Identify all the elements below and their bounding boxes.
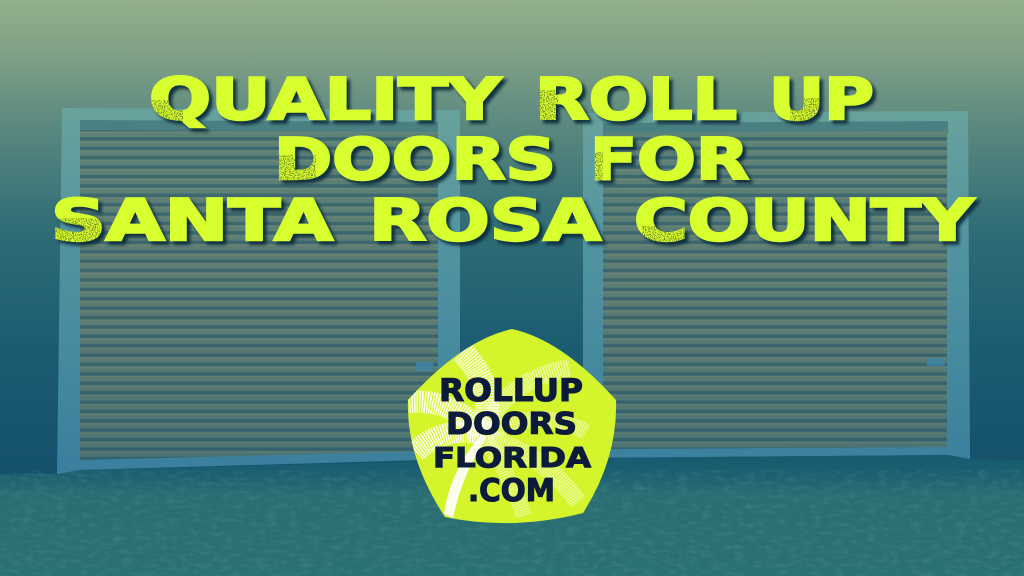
logo wordmark: .COM [468,473,555,509]
badge pentagon [408,329,616,523]
icon: palm tree [408,352,586,518]
left roll up door [57,108,460,474]
title line 3 [51,188,975,254]
palm fronds [408,352,586,516]
title [51,67,975,254]
palm trunk [444,434,487,518]
logo wordmark [433,373,591,509]
logo wordmark: DOORS [446,407,577,442]
title line 3: COUNTY [634,188,975,254]
right door frame [583,111,970,459]
left door shutter [80,130,438,460]
logo wordmark: FLORIDA [433,441,591,474]
title line 2: DOORS [274,127,556,193]
left door latch [416,362,433,371]
title line 2 [274,127,749,193]
left door shaded header [80,120,438,132]
title line 3: ROSA [369,188,601,254]
left door frame [57,108,460,474]
logo badge [408,329,616,523]
right roll up door [583,111,970,459]
title line 1: UP [769,67,874,133]
right door shaded header [603,121,948,134]
logo wordmark: ROLLUP [439,373,583,409]
right door latch [927,358,945,366]
grass foreground [0,455,1024,576]
title line 2: FOR [590,127,749,193]
title line 1: ROLL [535,67,737,133]
right door shutter [603,131,947,449]
title line 1: QUALITY [149,67,502,133]
title line 3: SANTA [51,188,333,254]
title line 1 [149,67,874,133]
